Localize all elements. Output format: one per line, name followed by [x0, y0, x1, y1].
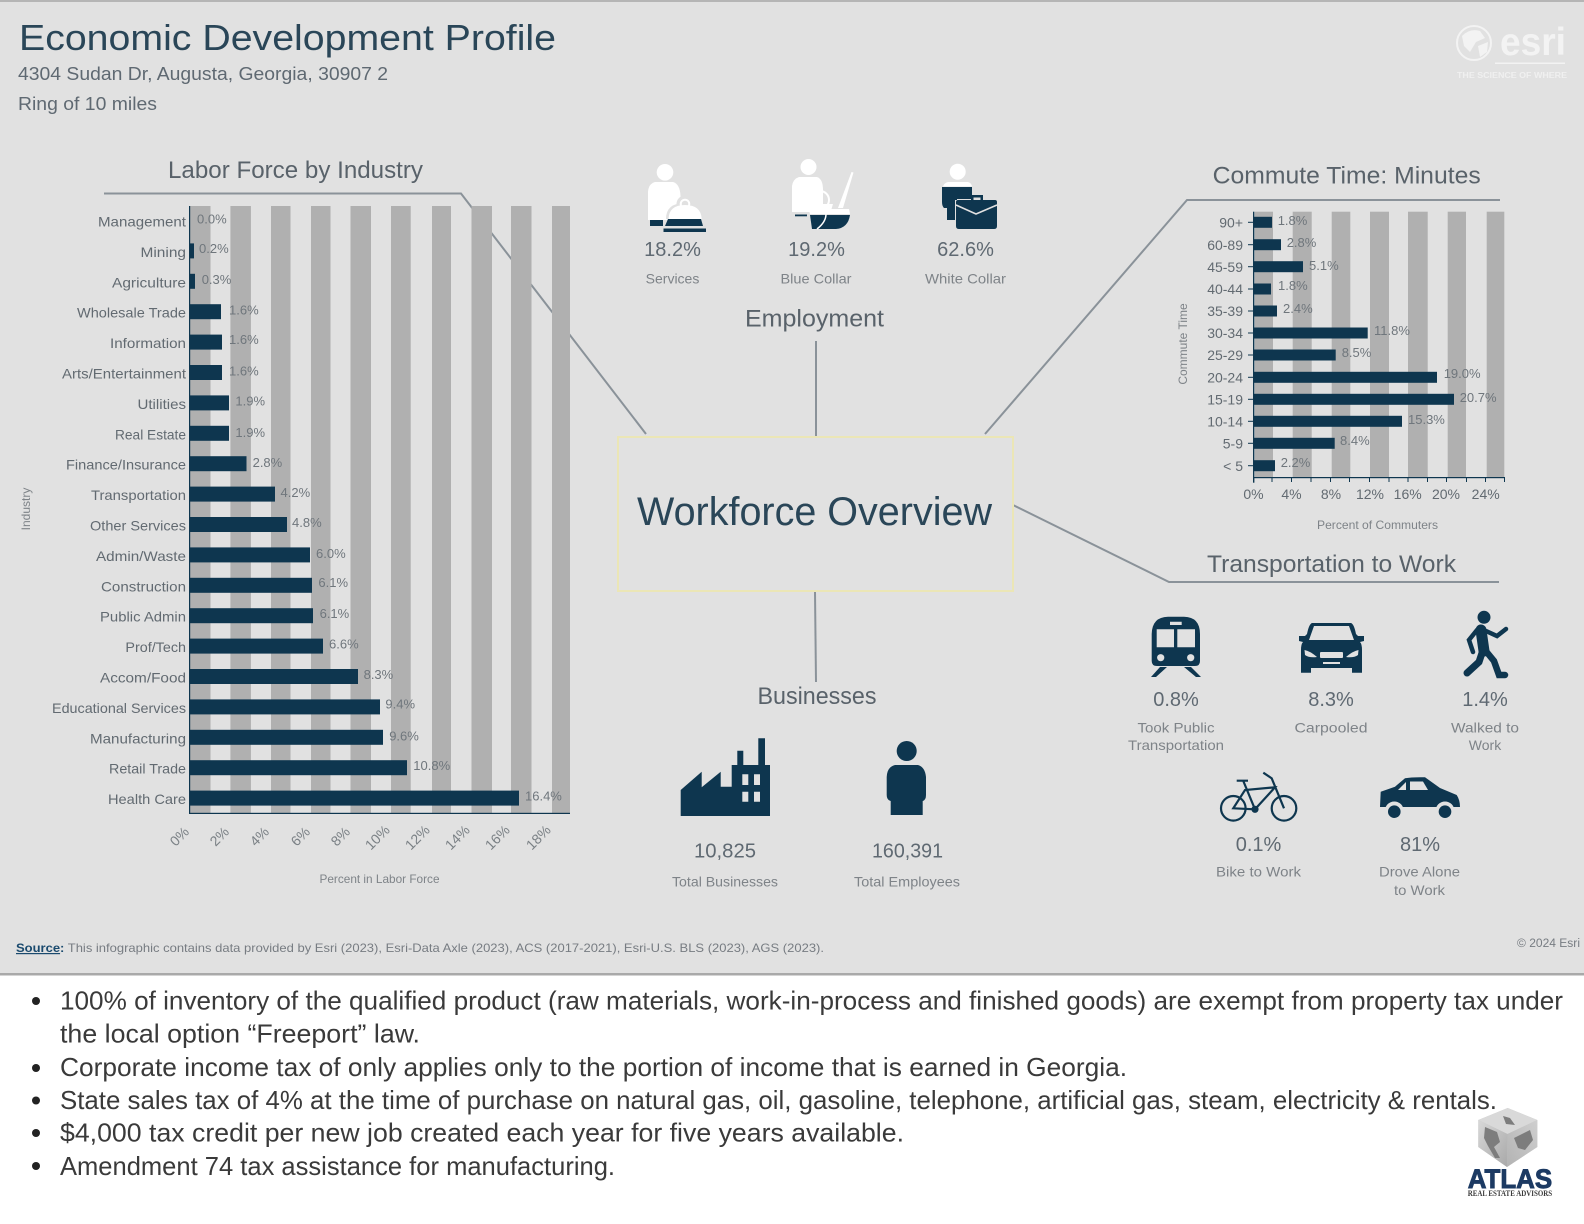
panel: labor force by industry [19, 157, 570, 886]
heading: Labor Force by Industry [168, 157, 423, 184]
bullet list: Amendment 74 tax assistance for manufacturing. [60, 1151, 615, 1181]
connector: transportation line [1013, 505, 1499, 582]
bar chart: industries: Construction [101, 578, 186, 594]
bullet list: 100% of inventory of the qualified product (raw materials, work-in-process and finished goods) are exempt from property tax under [60, 985, 1563, 1015]
y axis title: Commute Time [1176, 303, 1190, 385]
copyright: © 2024 Esri [1517, 938, 1580, 950]
panel: commute time [1176, 163, 1505, 532]
label: blue collar: Blue Collar [780, 270, 852, 286]
bullet list: $4,000 tax credit per new job created each year for five years available. [60, 1118, 904, 1148]
panel: workforce overview center box: Workforce Overview [637, 490, 992, 534]
bar chart: industries: 6.6% [329, 636, 359, 652]
heading: Transportation to Work [1207, 551, 1457, 578]
bar chart: industries: 0.3% [202, 272, 232, 287]
bar chart: industries: 16.4% [525, 788, 562, 804]
bar chart: commute time: 12% [1356, 486, 1384, 502]
panel: employment [644, 159, 1006, 333]
bar chart: commute time: 5-9 [1223, 436, 1243, 452]
label: walked: Walked to [1451, 720, 1519, 736]
bar chart: industries: Health Care [108, 791, 186, 807]
connector: labor force line [104, 194, 646, 434]
bar chart: commute time: 2.4% [1283, 301, 1313, 316]
y axis title: Industry [19, 488, 33, 530]
bar chart: industries: 0% [166, 823, 192, 849]
bar chart: industries: 1.6% [229, 332, 259, 347]
value: white collar: 62.6% [937, 239, 994, 261]
bar chart: industries: Mining [140, 244, 186, 260]
icon: atlas logo: ATLAS [1468, 1164, 1552, 1194]
icon: carpool car front [1299, 623, 1364, 673]
bar chart: industries: 14% [442, 822, 473, 853]
bar chart: industries: 1.6% [229, 302, 259, 318]
bar chart: industries: 6.0% [316, 546, 346, 561]
icon: atlas logo: REAL ESTATE ADVISORS [1468, 1189, 1553, 1198]
bar chart: commute time: 8% [1321, 486, 1341, 502]
connector: commute line [985, 200, 1500, 434]
bar chart: industries: Prof/Tech [125, 639, 186, 655]
bar chart: industries: Public Admin [100, 609, 186, 625]
value: public transportation: 0.8% [1153, 689, 1199, 711]
icon: car side [1380, 777, 1460, 820]
value: blue collar: 19.2% [788, 239, 845, 261]
bar chart: commute time: 8.4% [1340, 433, 1370, 448]
bar chart: commute time: 4% [1281, 486, 1302, 502]
title: Economic Development Profile [19, 17, 556, 58]
bar chart: industries: Educational Services [52, 700, 186, 716]
bar chart: industries: Accom/Food [100, 670, 186, 686]
bar chart: industries: Wholesale Trade [77, 305, 186, 321]
bar chart: industries: 4.8% [292, 515, 322, 530]
label: public transportation: Took Public [1138, 720, 1214, 736]
bar chart: commute time: 11.8% [1374, 323, 1410, 338]
bar chart: commute time: 60-89 [1207, 237, 1243, 253]
bar chart: industries: 6% [287, 823, 313, 849]
bar chart: commute time: 30-34 [1207, 325, 1243, 341]
bar chart: commute time: 16% [1394, 486, 1422, 502]
address: 4304 Sudan Dr, Augusta, Georgia, 30907 2 [18, 64, 388, 84]
value: bike: 0.1% [1236, 834, 1282, 856]
label: services: Services [646, 270, 699, 286]
value: total businesses: 10,825 [694, 841, 756, 863]
bar chart: industries: 1.9% [235, 394, 265, 408]
bar chart: industries: Agriculture [112, 274, 186, 290]
bar chart: industries: 6.1% [320, 606, 350, 621]
bar chart: commute time: < 5 [1223, 458, 1243, 474]
bar chart: industries: Information [110, 335, 186, 351]
bar chart: industries: 8.3% [364, 667, 394, 682]
bar chart: industries: 4.2% [280, 485, 311, 500]
label: walked [1451, 720, 1519, 753]
label: white collar: White Collar [925, 270, 1006, 286]
value: carpooled: 8.3% [1308, 689, 1354, 711]
bar chart: commute time: 20.7% [1460, 390, 1497, 405]
icon: esri logo: THE SCIENCE OF WHERE [1457, 71, 1568, 80]
bar chart: industries: Manufacturing [90, 730, 186, 746]
bar chart: industries: 18% [523, 822, 554, 853]
icon: white collar [942, 164, 997, 229]
icon: esri logo: esri [1500, 21, 1566, 64]
bar chart: commute time: 24% [1472, 486, 1500, 502]
bar chart: commute time: 8.5% [1342, 345, 1372, 360]
panel: workforce overview center box [618, 437, 1013, 591]
bar chart: commute time: 40-44 [1207, 281, 1243, 297]
value: total employees: 160,391 [872, 841, 943, 863]
bar chart: commute time: 90+ [1219, 214, 1243, 230]
icon: esri logo [1457, 21, 1568, 80]
bar chart: commute time: 1.8% [1278, 278, 1308, 293]
panel: transportation to work [1128, 551, 1519, 898]
bar chart: industries [52, 206, 570, 853]
value: services: 18.2% [644, 239, 701, 261]
bar chart: industries: Real Estate [115, 426, 186, 442]
bar chart: industries: 16% [482, 822, 513, 853]
bar chart: industries: 2.8% [253, 455, 283, 470]
heading: Businesses [758, 683, 876, 710]
bar chart: industries: 9.4% [385, 696, 415, 712]
bar chart: commute time: 45-59 [1207, 259, 1243, 275]
ring subtitle: Ring of 10 miles [18, 94, 157, 114]
label: public transportation [1128, 720, 1224, 753]
connector: businesses line [815, 592, 816, 682]
bar chart: industries: 10.8% [413, 758, 451, 773]
bar chart: commute time: 0% [1243, 486, 1264, 502]
bar chart: industries: Admin/Waste [96, 548, 186, 564]
bar chart: commute time [1207, 212, 1505, 502]
icon: services [648, 164, 706, 232]
x axis title: Percent in Labor Force [320, 872, 440, 886]
bar chart: commute time: 25-29 [1207, 347, 1243, 363]
bar chart: industries: 10% [362, 822, 393, 853]
header: title and location [18, 17, 556, 114]
bullet list: the local option “Freeport” law. [60, 1019, 420, 1049]
bar chart: industries: Retail Trade [109, 761, 186, 777]
bar chart: industries: 0.0% [197, 212, 227, 226]
bar chart: commute time: 1.8% [1278, 213, 1308, 228]
heading: Employment [745, 306, 884, 333]
label: drove alone [1379, 864, 1460, 898]
icon: atlas logo [1468, 1108, 1553, 1198]
bar chart: commute time: 20% [1432, 486, 1460, 502]
icon: walking person [1467, 611, 1506, 675]
x axis title: Percent of Commuters [1317, 518, 1438, 532]
label: total employees: Total Employees [854, 874, 960, 890]
bar chart: commute time: 15.3% [1408, 412, 1445, 427]
bar chart: industries: 6.1% [318, 575, 348, 590]
label: bike: Bike to Work [1216, 864, 1302, 880]
icon: bicycle [1221, 773, 1296, 821]
icon: employee person [887, 741, 926, 815]
bar chart: industries: 4% [246, 823, 272, 849]
label: drove alone: to Work [1394, 882, 1446, 898]
bullet list: Corporate income tax of only applies only to the portion of income that is earned in Georgia. [60, 1052, 1127, 1082]
bar chart: industries: 1.9% [235, 425, 265, 440]
bar chart: industries: 8% [327, 823, 353, 849]
bar chart: industries: 2% [206, 823, 232, 849]
bar chart: industries: Finance/Insurance [66, 457, 186, 473]
icon: train [1151, 617, 1201, 677]
source note: Source : This infographic contains data provided by Esri (2023), Esri-Data Axle (2023), ACS (2017-2021), Esri-U.S. BLS (2023), AGS (2023). [16, 941, 824, 955]
bullet list [32, 985, 1563, 1181]
label: walked: Work [1469, 737, 1502, 753]
heading: Commute Time: Minutes [1213, 163, 1481, 190]
bar chart: industries: Transportation [91, 487, 186, 503]
bar chart: commute time: 15-19 [1207, 392, 1243, 408]
bar chart: commute time: 19.0% [1444, 366, 1481, 381]
bar chart: industries: 9.6% [389, 728, 419, 744]
label: total businesses: Total Businesses [672, 874, 778, 890]
bar chart: industries: Utilities [138, 396, 186, 412]
bullet list: State sales tax of 4% at the time of purchase on natural gas, oil, gasoline, telephone, artificial gas, steam, electricity & rentals. [60, 1085, 1497, 1115]
bar chart: commute time: 10-14 [1207, 414, 1243, 430]
bar chart: commute time: 2.2% [1281, 455, 1311, 470]
icon: factory [681, 738, 770, 816]
bar chart: industries: Management [98, 214, 186, 230]
bar chart: industries: Other Services [90, 518, 186, 534]
bar chart: commute time: 20-24 [1207, 370, 1243, 386]
label: carpooled: Carpooled [1294, 720, 1368, 736]
connector: employment line [815, 341, 817, 436]
label: public transportation: Transportation [1128, 737, 1224, 753]
bar chart: industries: Arts/Entertainment [62, 366, 186, 382]
label: drove alone: Drove Alone [1379, 864, 1460, 880]
bar chart: commute time: 5.1% [1309, 258, 1339, 273]
bar chart: industries: 12% [402, 822, 433, 853]
bar chart: industries: 0.2% [199, 241, 229, 256]
icon: blue collar [792, 159, 854, 229]
bar chart: commute time: 35-39 [1207, 303, 1243, 319]
value: walked: 1.4% [1462, 689, 1508, 711]
bar chart: industries: 1.6% [229, 364, 259, 378]
value: drove alone: 81% [1400, 834, 1440, 856]
bar chart: commute time: 2.8% [1287, 235, 1317, 250]
panel: businesses [672, 683, 960, 890]
